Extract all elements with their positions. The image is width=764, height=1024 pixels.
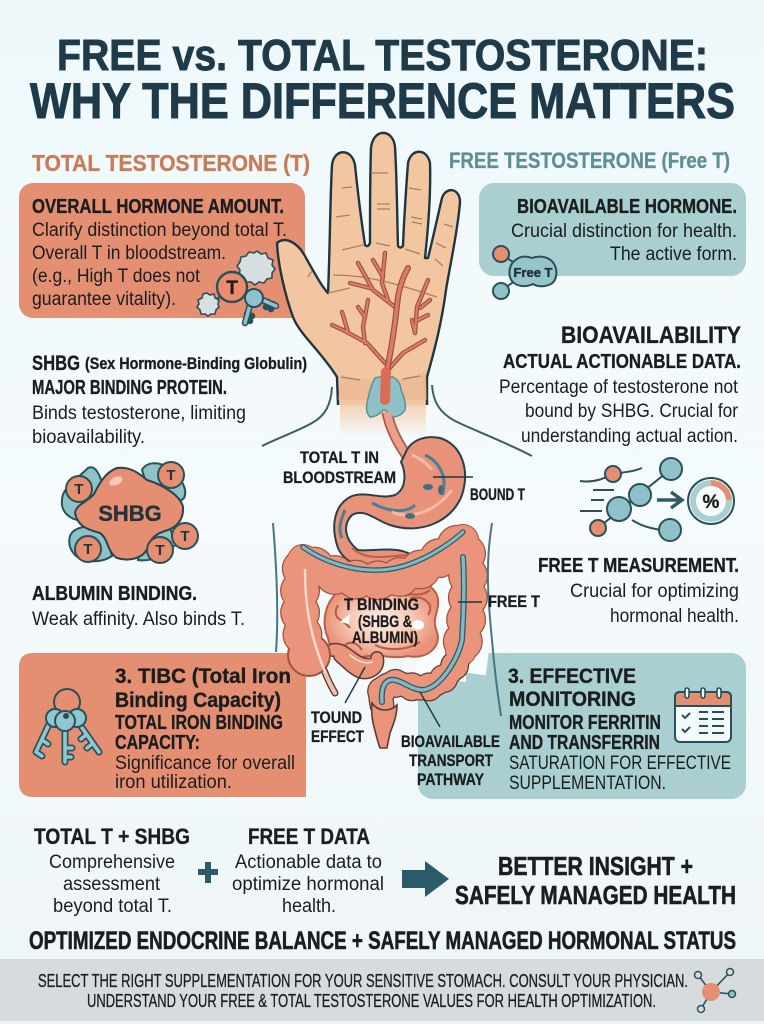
summary: better insight <box>455 851 736 910</box>
panel: overall hormone amount: OVERALL HORMONE AMOUNT. <box>32 196 284 218</box>
panel: overall hormone amount: guarantee vitality). <box>32 289 176 310</box>
panel: bioavailable hormone: The active form. <box>610 244 737 265</box>
icon: molecules to percentage <box>580 458 734 541</box>
heading: SHBG: Binds testosterone, limiting <box>32 403 246 424</box>
label: tound effect: TOUND <box>311 708 362 727</box>
label: bioavailable transport pathway: PATHWAY <box>417 770 485 789</box>
summary: free T data: health. <box>282 896 336 917</box>
anatomy: body outlines <box>273 523 501 716</box>
summary: total T + SHBG: beyond total T. <box>53 896 172 917</box>
text: bioavailability <box>499 322 741 447</box>
text: bioavailability: understanding actual action. <box>521 426 738 447</box>
anatomy: small intestine <box>325 583 438 659</box>
panel: effective monitoring: MONITOR FERRITIN <box>509 712 661 734</box>
label: T binding: T BINDING <box>344 595 419 614</box>
label: bound T: BOUND T <box>470 485 525 504</box>
text: free T measurement: hormonal health. <box>610 606 739 627</box>
text: albumin binding <box>32 583 245 630</box>
summary: free T data <box>232 824 384 917</box>
summary: total T + SHBG: assessment <box>63 874 161 895</box>
label: total T in bloodstream: TOTAL T IN <box>300 448 379 467</box>
icon: keys <box>36 689 99 762</box>
icon: molecules to percentage: % <box>703 492 720 513</box>
anatomy: colon halo <box>416 540 468 682</box>
summary: better insight: BETTER INSIGHT + <box>498 851 693 881</box>
panel: bioavailable hormone: Crucial distinction for health. <box>511 221 737 242</box>
text: bioavailability: BIOAVAILABILITY <box>561 322 741 349</box>
panel: TIBC: Binding Capacity) <box>115 689 281 712</box>
panel: overall hormone amount: (e.g., High T does not <box>32 266 201 287</box>
anatomy: neck and shoulders <box>262 385 532 456</box>
anatomy: stomach <box>334 412 465 573</box>
icon: T molecule with keys: T <box>226 278 238 299</box>
panel: TIBC: 3. TIBC (Total Iron <box>115 665 291 688</box>
heading: SHBG: SHBG <box>32 352 80 375</box>
icon: SHBG protein with T: T <box>74 481 84 498</box>
panel: effective monitoring: AND TRANSFERRIN <box>509 732 660 754</box>
icon: Free T molecule: Free T <box>513 265 553 280</box>
anatomy: large intestine <box>288 532 468 705</box>
heading: SHBG <box>32 352 307 448</box>
summary: free T data: FREE T DATA <box>248 824 370 849</box>
panel: bioavailable hormone <box>479 183 746 276</box>
summary: total T + SHBG: Comprehensive <box>49 852 175 873</box>
text: albumin binding: Weak affinity. Also binds T. <box>32 609 245 630</box>
heading: SHBG: (Sex Hormone-Binding Globulin) <box>85 355 307 373</box>
summary: total T + SHBG: TOTAL T + SHBG <box>34 824 190 849</box>
text: bioavailability: Percentage of testosterone not <box>499 377 739 398</box>
panel: TIBC: Significance for overall <box>115 753 295 774</box>
panel: TIBC: CAPACITY: <box>115 732 200 754</box>
heading: total testosterone: TOTAL TESTOSTERONE (T) <box>32 150 310 176</box>
anatomy: palm veins <box>332 253 430 400</box>
summary: free T data: Actionable data to <box>235 852 382 873</box>
anatomy: ileum hairpin <box>333 650 377 672</box>
label: T binding: (SHBG & <box>358 612 412 631</box>
text: albumin binding: ALBUMIN BINDING. <box>32 583 197 605</box>
icon: calendar <box>675 688 731 742</box>
icon: SHBG protein with T: T <box>166 467 176 484</box>
label: tound effect: EFFECT <box>311 727 364 746</box>
footer band <box>0 959 764 1021</box>
panel: overall hormone amount: Overall T in bloodstream. <box>32 243 226 264</box>
icon: footer molecule <box>694 968 736 1012</box>
panel: TIBC <box>19 653 306 797</box>
summary: free T data: optimize hormonal <box>232 874 384 895</box>
title <box>30 31 735 129</box>
label: bioavailable transport pathway: TRANSPORT <box>409 751 493 770</box>
arrow <box>402 861 449 897</box>
icon: SHBG protein with T: T <box>83 541 93 558</box>
label: total T in bloodstream <box>283 448 396 487</box>
leader lines <box>345 477 482 727</box>
anatomy: rectum <box>372 703 397 748</box>
heading: SHBG: bioavailability. <box>32 427 145 448</box>
label: T binding <box>344 595 419 647</box>
heading: SHBG: MAJOR BINDING PROTEIN. <box>32 377 227 399</box>
text: free T measurement <box>538 555 739 627</box>
icon: SHBG protein with T <box>62 462 198 563</box>
icon: Free T molecule <box>493 246 556 299</box>
anatomy: hand <box>277 133 460 405</box>
panel: effective monitoring: MONITORING <box>509 688 636 711</box>
summary: total T + SHBG <box>34 824 190 917</box>
icon: plus <box>198 862 218 883</box>
panel: effective monitoring: 3. EFFECTIVE <box>508 665 636 688</box>
label: bioavailable transport pathway <box>401 732 500 789</box>
icon: SHBG protein with T: T <box>155 542 165 559</box>
panel: effective monitoring <box>418 653 746 799</box>
text: free T measurement: Crucial for optimizing <box>570 581 739 602</box>
label: tound effect <box>311 708 364 746</box>
icon: T molecule with keys <box>197 251 276 323</box>
label: total T in bloodstream: BLOODSTREAM <box>283 468 396 487</box>
label: T binding: ALBUMIN) <box>352 628 418 647</box>
icon: SHBG protein with T: T <box>180 528 190 545</box>
anatomy: thyroid <box>366 376 405 417</box>
panel: TIBC: iron utilization. <box>115 772 232 793</box>
panel: overall hormone amount <box>19 183 305 318</box>
label: free T: FREE T <box>488 592 541 611</box>
panel: overall hormone amount: Clarify distinction beyond total T. <box>32 220 287 241</box>
anatomy: small intestine loop to stomach <box>352 548 414 573</box>
panel: TIBC: TOTAL IRON BINDING <box>115 712 283 734</box>
label: bioavailable transport pathway: BIOAVAILABLE <box>401 732 500 751</box>
panel: effective monitoring: SUPPLEMENTATION. <box>509 773 666 794</box>
text: bioavailability: bound by SHBG. Crucial for <box>525 401 739 422</box>
icon: SHBG protein with T: SHBG <box>98 501 162 526</box>
anatomy: esophagus <box>387 412 407 456</box>
vein through thyroid <box>385 372 386 400</box>
